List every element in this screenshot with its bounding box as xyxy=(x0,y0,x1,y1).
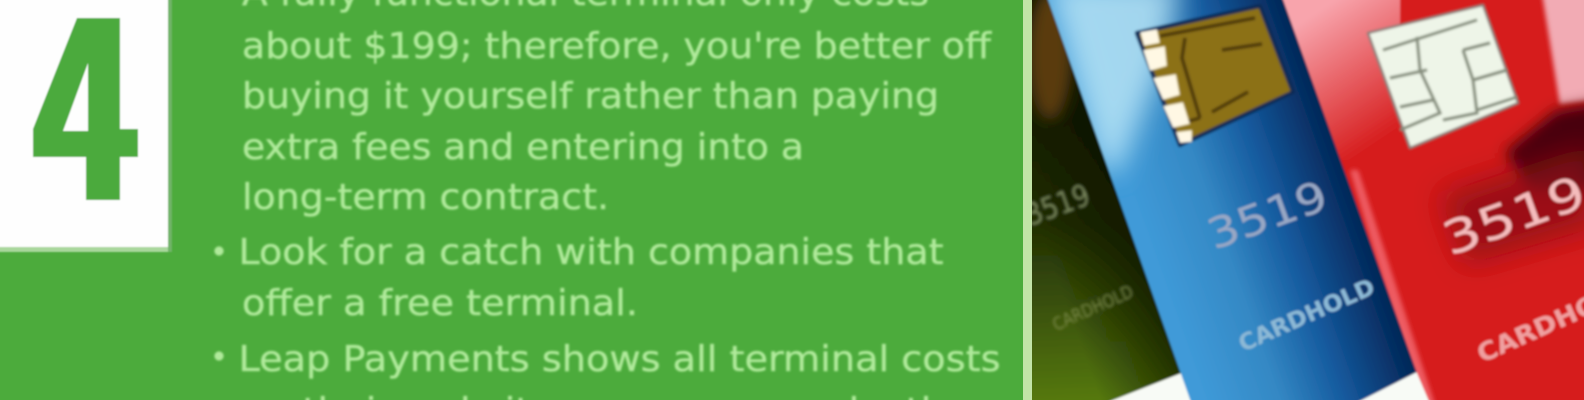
blue card: CARDHOLD xyxy=(1235,274,1379,357)
bullet: Leap Payments xyxy=(214,339,1000,400)
red card chip xyxy=(1368,5,1518,148)
bullet: free terminal catch xyxy=(213,236,944,317)
bullet: terminal cost: long-term contract. xyxy=(242,177,609,218)
light divider strip xyxy=(1023,0,1032,400)
bullet: terminal cost: about $199; therefore, you're better off xyxy=(242,26,992,67)
bullet: terminal cost: extra fees and entering into a xyxy=(242,127,804,168)
bullet: free terminal catch: offer a free terminal. xyxy=(242,283,638,324)
number box xyxy=(0,0,172,252)
photo: credit cards xyxy=(1020,0,1584,400)
green card: CARDHOLD xyxy=(1049,281,1137,336)
numeral 4 xyxy=(33,18,138,200)
red card: 3519 xyxy=(1435,165,1584,266)
bullet: Leap Payments: Leap Payments shows all terminal costs xyxy=(238,339,1000,380)
green panel background xyxy=(0,0,1024,400)
bullet: terminal cost xyxy=(242,0,992,218)
body text xyxy=(214,0,1000,400)
green card xyxy=(1020,0,1184,400)
bullet: free terminal catch: Look for a catch with companies that xyxy=(238,232,944,273)
red card xyxy=(1270,0,1584,400)
blue card: 3519 xyxy=(1201,171,1334,259)
blue card xyxy=(1041,0,1417,400)
blue card chip xyxy=(1137,6,1293,145)
green card: 3519 xyxy=(1021,178,1095,234)
bullet: terminal cost: buying it yourself rather than paying xyxy=(242,76,939,117)
